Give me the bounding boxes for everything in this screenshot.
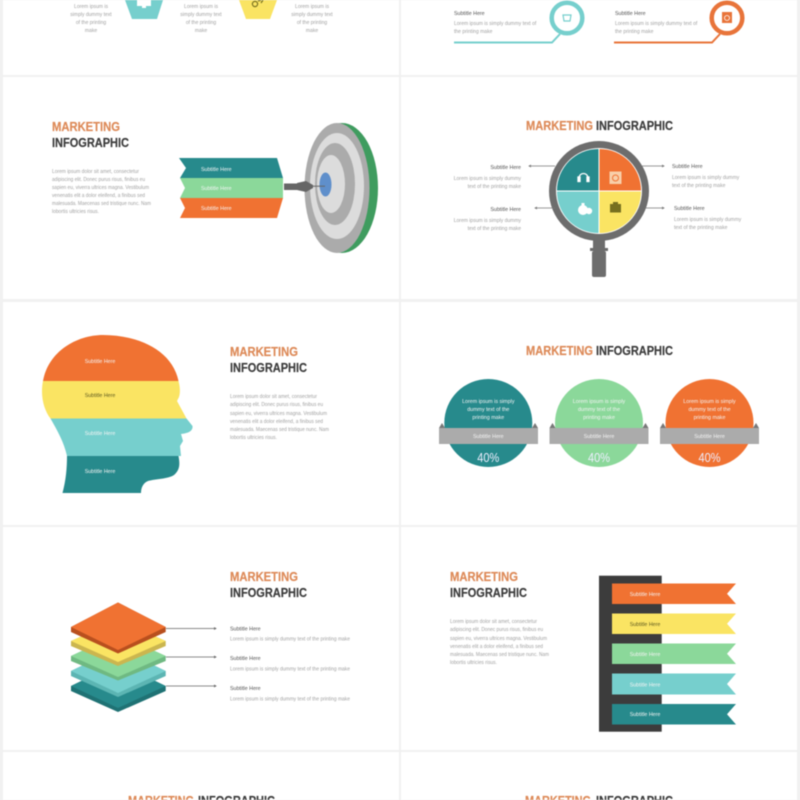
item labels: Lorem ipsum is simply dummy text of the printing make	[230, 636, 350, 642]
heading	[230, 569, 308, 600]
panel: target	[3, 77, 399, 299]
callout: teal basket	[454, 3, 582, 42]
panel: magnifier	[401, 77, 797, 299]
heading: INFOGRAPHIC	[230, 585, 308, 600]
text block	[230, 394, 329, 441]
icon: briefcase	[610, 202, 621, 212]
heading: MARKETING	[450, 569, 518, 584]
heading: MARKETING	[526, 343, 593, 358]
heading	[525, 793, 674, 800]
badge: green: printing make	[583, 415, 615, 421]
panel: top right callouts	[401, 0, 797, 75]
text block: lobortis ultricies risus.	[52, 209, 99, 215]
badge: orange	[660, 379, 759, 467]
item labels	[230, 626, 350, 702]
labels right	[672, 164, 742, 231]
arrow ribbons: Subtitle Here	[201, 167, 232, 173]
badge: green	[550, 379, 648, 467]
badge: teal: Lorem ipsum is simply	[462, 399, 515, 405]
panel: head	[3, 302, 399, 525]
dart and target board	[284, 123, 378, 253]
text block: sapien eu, viverra ultrices magna. Vestibulum	[450, 636, 547, 642]
panel: bottom right	[401, 752, 797, 800]
badge: green: Lorem ipsum is simply	[573, 399, 626, 405]
text block: sapien eu, viverra ultrices magna. Vestibulum	[230, 411, 327, 417]
labels right: text of the printing make	[674, 225, 728, 231]
item labels: Lorem ipsum is simply dummy text of the printing make	[230, 696, 350, 702]
heading	[450, 569, 528, 600]
layer stack	[71, 602, 166, 712]
callout: orange square: the printing make	[615, 29, 654, 35]
text: column one	[70, 4, 112, 34]
text: column three: simply dummy text	[291, 12, 333, 18]
callout: orange square	[614, 3, 742, 42]
ribbon list: Subtitle Here	[630, 652, 660, 658]
text block: malesuada. Maecenas sed tristique nunc. Nam	[52, 201, 151, 207]
badge: teal: Subtitle Here	[473, 434, 504, 440]
labels left: Lorem ipsum is simply dummy	[454, 176, 521, 182]
labels left: text of the printing make	[468, 184, 521, 190]
text block: Lorem ipsum dolor sit amet, consectetur	[230, 394, 317, 400]
text block: Lorem ipsum dolor sit amet, consectetur	[450, 619, 537, 625]
item labels: Subtitle Here	[230, 626, 261, 632]
labels left: text of the printing make	[468, 226, 521, 232]
head silhouette: Subtitle Here	[85, 469, 115, 475]
heading: MARKETING	[52, 119, 120, 134]
arrows	[529, 165, 664, 209]
arrow ribbons	[179, 158, 283, 218]
callout: teal basket: the printing make	[454, 29, 493, 35]
labels right: text of the printing make	[672, 183, 726, 189]
text: column two: simply dummy text	[180, 12, 222, 18]
panel: three circles	[401, 302, 797, 525]
badge: orange: dummy text of the	[688, 407, 731, 413]
callout: teal basket: Lorem ipsum is simply dummy text of	[454, 21, 537, 27]
badge: orange: printing make	[694, 415, 725, 421]
head silhouette: Subtitle Here	[85, 393, 115, 399]
ribbon list: Subtitle Here	[630, 592, 660, 598]
heading: INFOGRAPHIC	[450, 585, 528, 600]
labels right: Subtitle Here	[674, 206, 705, 212]
arrow ribbons: Subtitle Here	[201, 206, 232, 212]
icon: teal hexagon	[125, 0, 163, 19]
item labels: Subtitle Here	[230, 686, 261, 692]
text block: malesuada. Maecenas sed tristique nunc. Nam	[230, 427, 329, 433]
magnifier handle	[590, 238, 608, 277]
text block: sapien eu, viverra ultrices magna. Vestibulum	[52, 185, 149, 191]
text block: malesuada. Maecenas sed tristique nunc. Nam	[450, 652, 549, 658]
badge: orange: Subtitle Here	[694, 434, 725, 440]
badge: orange: Lorem ipsum is simply	[683, 399, 736, 405]
text: column two: of the printing	[186, 20, 216, 26]
head silhouette: Subtitle Here	[85, 431, 115, 437]
text: column one: Lorem ipsum is	[74, 4, 108, 10]
text block: adipiscing elit. Donec purus risus, finibus eu	[450, 627, 543, 633]
text: column one: simply dummy text	[70, 12, 112, 18]
badge: teal: 40%	[477, 450, 500, 465]
text block: adipiscing elit. Donec purus risus, finibus eu	[52, 177, 145, 183]
text: column three: Lorem ipsum is	[295, 4, 329, 10]
text block: venenatis elit a dolor eleifend, a finibus sed	[52, 193, 145, 199]
labels left: Subtitle Here	[490, 207, 521, 213]
heading: INFOGRAPHIC	[596, 118, 674, 133]
icon: yellow hexagon	[239, 0, 277, 19]
badge: teal: printing make	[472, 415, 504, 421]
panel: top left hexagons	[3, 0, 399, 75]
ribbon list: Subtitle Here	[630, 712, 660, 718]
arrow ribbons: Subtitle Here	[201, 186, 232, 192]
ribbon list	[612, 584, 736, 724]
magnifier quadrants	[549, 141, 649, 241]
head silhouette	[42, 335, 193, 493]
heading	[128, 793, 276, 800]
badge: green: dummy text of the	[578, 407, 620, 413]
text: column one: make	[85, 28, 97, 34]
ribbon list: Subtitle Here	[630, 622, 660, 628]
badge: green: Subtitle Here	[584, 434, 614, 440]
text block: adipiscing elit. Donec purus risus, finibus eu	[230, 402, 323, 408]
text: column two: Lorem ipsum is	[184, 4, 218, 10]
item labels: Subtitle Here	[230, 656, 261, 662]
labels left	[454, 165, 521, 232]
item labels: Lorem ipsum is simply dummy text of the printing make	[230, 666, 350, 672]
callout: teal basket: Subtitle Here	[454, 11, 485, 17]
panel: bottom left	[3, 752, 399, 800]
heading: MARKETING	[230, 569, 298, 584]
heading: MARKETING	[230, 344, 298, 359]
callout: orange square: Lorem ipsum is simply dummy text of	[615, 21, 698, 27]
text block: lobortis ultricies risus.	[450, 660, 497, 666]
labels right: Lorem ipsum is simply dummy	[672, 175, 740, 181]
icon: money bag	[578, 203, 592, 215]
heading: MARKETING	[526, 118, 593, 133]
text block: venenatis elit a dolor eleifend, a finibus sed	[450, 644, 543, 650]
labels right: Subtitle Here	[672, 164, 703, 170]
text: column three	[291, 4, 333, 34]
text block	[52, 169, 151, 215]
text block: Lorem ipsum dolor sit amet, consectetur	[52, 169, 139, 175]
heading	[526, 343, 674, 358]
badge: teal	[439, 379, 538, 467]
heading	[230, 344, 308, 375]
text: column two: make	[195, 28, 207, 34]
labels left: Subtitle Here	[490, 165, 521, 171]
heading: INFOGRAPHIC	[596, 343, 674, 358]
heading	[526, 118, 674, 133]
panel: layers	[3, 527, 399, 750]
head silhouette: Subtitle Here	[85, 359, 115, 365]
callout: orange square: Subtitle Here	[615, 11, 646, 17]
text block	[450, 619, 549, 666]
badge: green: 40%	[588, 450, 610, 465]
labels right: Lorem ipsum is simply dummy	[674, 217, 742, 223]
text: column three: of the printing	[297, 20, 327, 26]
heading: INFOGRAPHIC	[230, 360, 308, 375]
panel: ribbons	[401, 527, 797, 750]
badge: teal: dummy text of the	[467, 407, 509, 413]
badge: orange: 40%	[698, 450, 721, 465]
text block: lobortis ultricies risus.	[230, 435, 277, 441]
ribbon list: Subtitle Here	[630, 682, 660, 688]
heading: INFOGRAPHIC	[52, 135, 130, 150]
dark backing bar	[599, 576, 662, 732]
icon: photo square	[610, 172, 622, 184]
heading	[52, 119, 130, 150]
labels left: Lorem ipsum is simply dummy	[454, 218, 521, 224]
arrows	[166, 628, 216, 687]
text: column one: of the printing	[76, 20, 106, 26]
text block: venenatis elit a dolor eleifend, a finibus sed	[230, 419, 323, 425]
icon: headset	[578, 174, 589, 182]
text: column three: make	[306, 28, 318, 34]
text: column two	[180, 4, 222, 34]
